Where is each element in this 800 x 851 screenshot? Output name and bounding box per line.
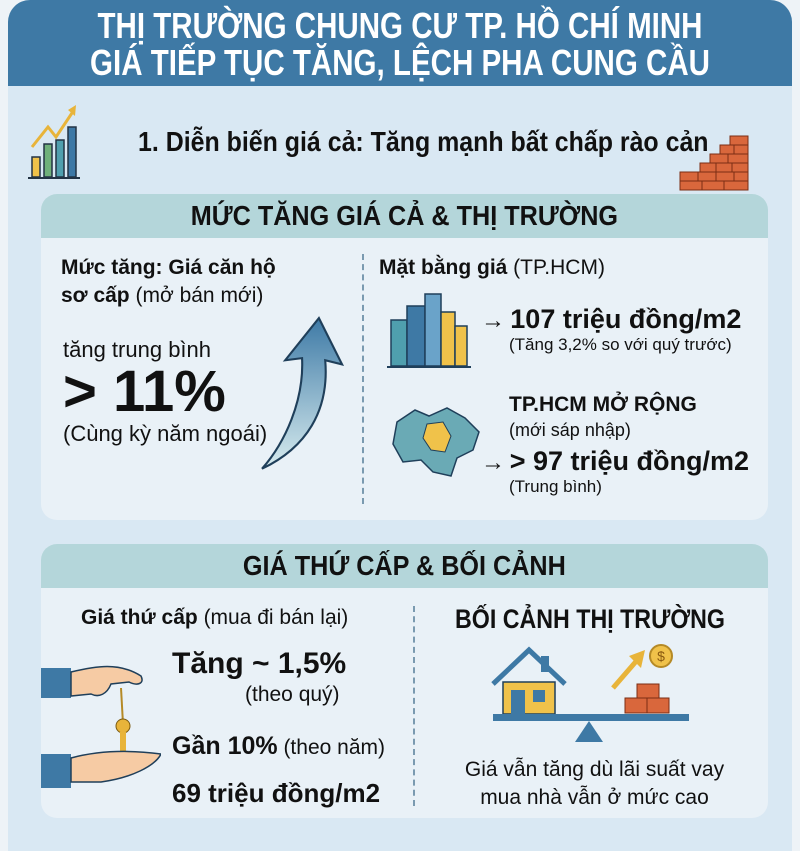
section heading: 1. Diễn biến giá cả: Tăng mạnh bất chấp rào cản	[138, 126, 709, 157]
panel heading: MỨC TĂNG GIÁ CẢ & THỊ TRƯỜNG	[191, 200, 618, 231]
text: 107 million	[481, 304, 741, 354]
panel: secondary price & context	[41, 544, 768, 818]
text: +1.5% quarterly: Tăng ~ 1,5%	[172, 647, 346, 680]
panel: price increase & market	[41, 194, 768, 520]
text: +1.5% quarterly	[172, 647, 346, 706]
divider	[413, 606, 415, 806]
text: expanded HCMC	[509, 392, 697, 440]
text: expanded HCMC: (mới sáp nhập)	[509, 420, 631, 440]
text: >11%: tăng trung bình (Cùng kỳ năm ngoái)	[63, 337, 267, 446]
icon: hands with key	[41, 666, 161, 788]
text: expanded HCMC: TP.HCM MỞ RỘNG	[509, 393, 697, 416]
title: GIÁ TIẾP TỤC TĂNG, LỆCH PHA CUNG CẦU	[90, 42, 710, 83]
text: primary price increase: Mức tăng: Giá căn hộ	[61, 256, 276, 279]
text: context description: Giá vẫn tăng dù lãi suất vay	[465, 758, 724, 781]
icon: map	[392, 407, 480, 477]
icon: brick wall	[680, 136, 748, 190]
icon: big up arrow	[261, 316, 344, 470]
text: price level: Mặt bằng giá (TP.HCM)	[379, 256, 605, 279]
panel heading	[41, 194, 768, 238]
panel heading: GIÁ THỨ CẤP & BỐI CẢNH	[243, 550, 566, 581]
icon: house vs bricks on seesaw	[491, 644, 689, 742]
text: 107 million: → 107 triệu đồng/m2	[481, 304, 741, 334]
text: >97 million: → > 97 triệu đồng/m2	[481, 446, 749, 476]
text: +1.5% quarterly: (theo quý)	[245, 683, 340, 706]
icon: house vs bricks on seesaw: $	[657, 648, 665, 664]
heading: market context: BỐI CẢNH THỊ TRƯỜNG	[455, 604, 725, 634]
text: >97 million: (Trung bình)	[509, 477, 602, 496]
text: context description: mua nhà vẫn ở mức cao	[480, 786, 709, 809]
title	[8, 0, 792, 86]
text: >97 million	[481, 446, 749, 496]
panel heading	[41, 544, 768, 588]
icon: bar chart with arrow	[28, 105, 80, 179]
divider	[362, 254, 364, 504]
text: ~10% yearly: Gần 10% (theo năm)	[172, 732, 385, 760]
title: THỊ TRƯỜNG CHUNG CƯ TP. HỒ CHÍ MINH	[98, 5, 702, 46]
text: primary price increase	[61, 256, 276, 307]
text: 69 million: 69 triệu đồng/m2	[172, 778, 380, 808]
icon: city buildings	[387, 293, 471, 368]
text: context description	[465, 758, 724, 809]
text: 107 million: (Tăng 3,2% so với quý trước)	[509, 335, 732, 354]
text: >11%: > 11%	[63, 359, 226, 424]
text: primary price increase: sơ cấp (mở bán mới)	[61, 284, 263, 307]
text: secondary price: Giá thứ cấp (mua đi bán lại)	[81, 606, 348, 629]
